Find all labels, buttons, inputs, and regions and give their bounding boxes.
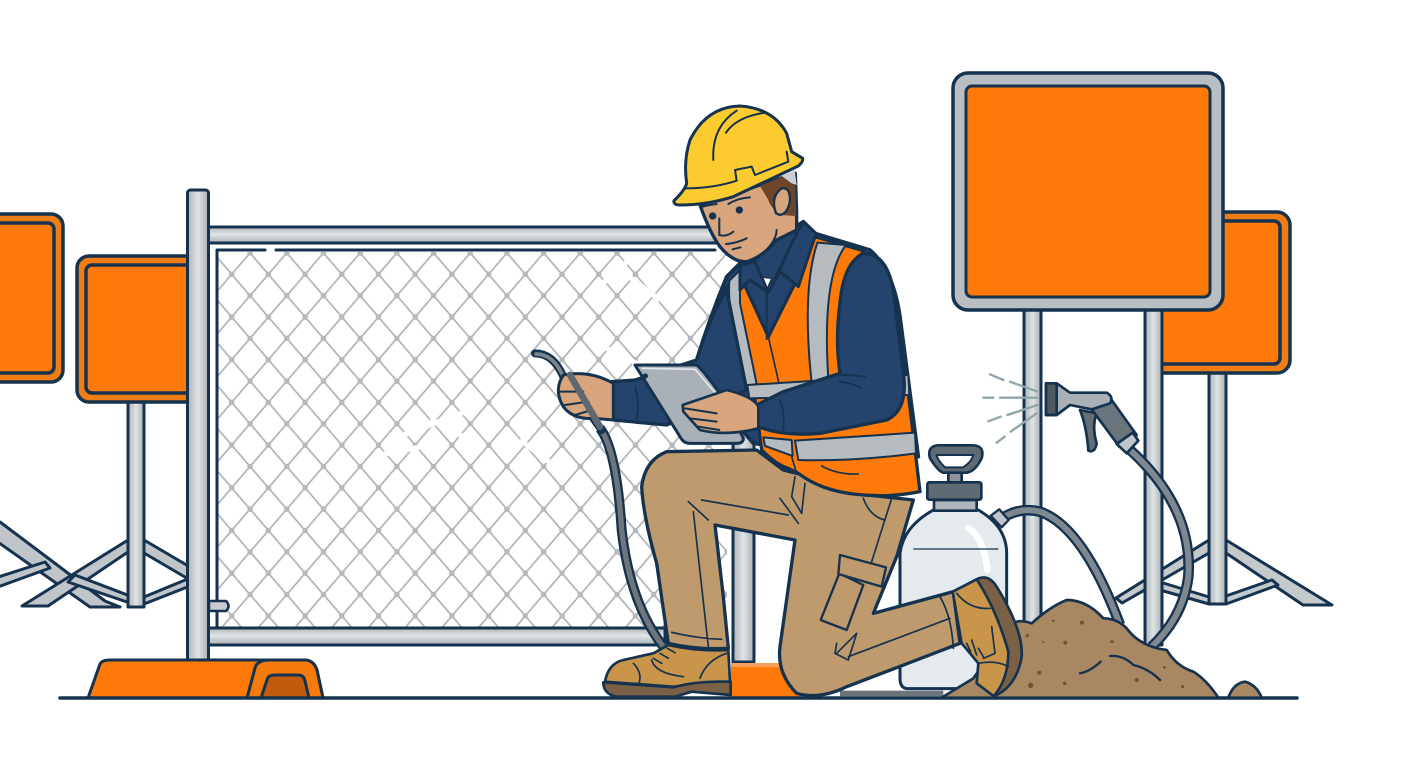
stand legs: [1116, 540, 1332, 605]
vest: [724, 237, 920, 496]
neck: [934, 500, 977, 511]
chain-link mesh: [217, 250, 727, 628]
stand pole: [128, 400, 144, 607]
orange fence base: [88, 660, 323, 698]
big sign poles: [1024, 305, 1162, 645]
collar: [740, 222, 816, 293]
back right sign with stand: [1116, 212, 1332, 605]
trouser folds: [672, 477, 953, 660]
reflective straps: [729, 243, 916, 460]
tank hose: [991, 509, 1120, 625]
shirt torso: [697, 222, 918, 457]
frame inner lines: [217, 250, 715, 628]
spray gun: [1046, 383, 1138, 453]
helmet: [674, 106, 803, 205]
undershirt: [757, 277, 772, 292]
worker: [535, 106, 1022, 697]
far left sign: [0, 214, 63, 382]
centre base block: [731, 663, 801, 698]
bottom rail: [205, 628, 665, 645]
tank body: [900, 510, 1007, 689]
top rail: [205, 227, 730, 243]
handle: [929, 445, 982, 482]
hard-hat liner: [782, 170, 797, 185]
fill level line: [913, 547, 998, 551]
sign panel: [1150, 212, 1290, 373]
legs: [642, 450, 960, 696]
face: [700, 173, 797, 262]
wand hand: [558, 374, 613, 427]
hoses and spray gun: [983, 374, 1189, 647]
hair: [760, 175, 796, 216]
tablet hand: [683, 390, 758, 433]
ground line: [60, 696, 1297, 700]
rear boot: [953, 577, 1022, 697]
fence: [188, 190, 754, 662]
upper body: [535, 106, 920, 496]
far left sign legs: [0, 522, 120, 607]
water spray: [983, 374, 1037, 443]
tablet: [635, 365, 743, 443]
hand hose: [600, 428, 663, 647]
ear: [774, 188, 790, 215]
stand pole: [1209, 372, 1226, 604]
wand: [535, 353, 602, 430]
sign panel: [77, 256, 202, 402]
gun hose: [1128, 448, 1189, 647]
highlight: [968, 528, 987, 570]
cap: [927, 482, 981, 500]
right post: [733, 430, 754, 662]
facial features: [703, 197, 777, 262]
dirt pile: [942, 600, 1262, 698]
far sleeve: [612, 290, 747, 425]
front boot: [603, 645, 731, 697]
near sleeve: [753, 253, 904, 434]
left post: [188, 190, 208, 662]
placket: [764, 290, 770, 340]
cargo pocket: [821, 555, 886, 630]
sprayer tank: [840, 445, 1007, 697]
latch: [209, 601, 228, 611]
left sign with stand: [22, 256, 202, 607]
tank base bar: [840, 691, 943, 697]
stand legs: [22, 540, 190, 606]
big sign panel: [953, 73, 1223, 310]
